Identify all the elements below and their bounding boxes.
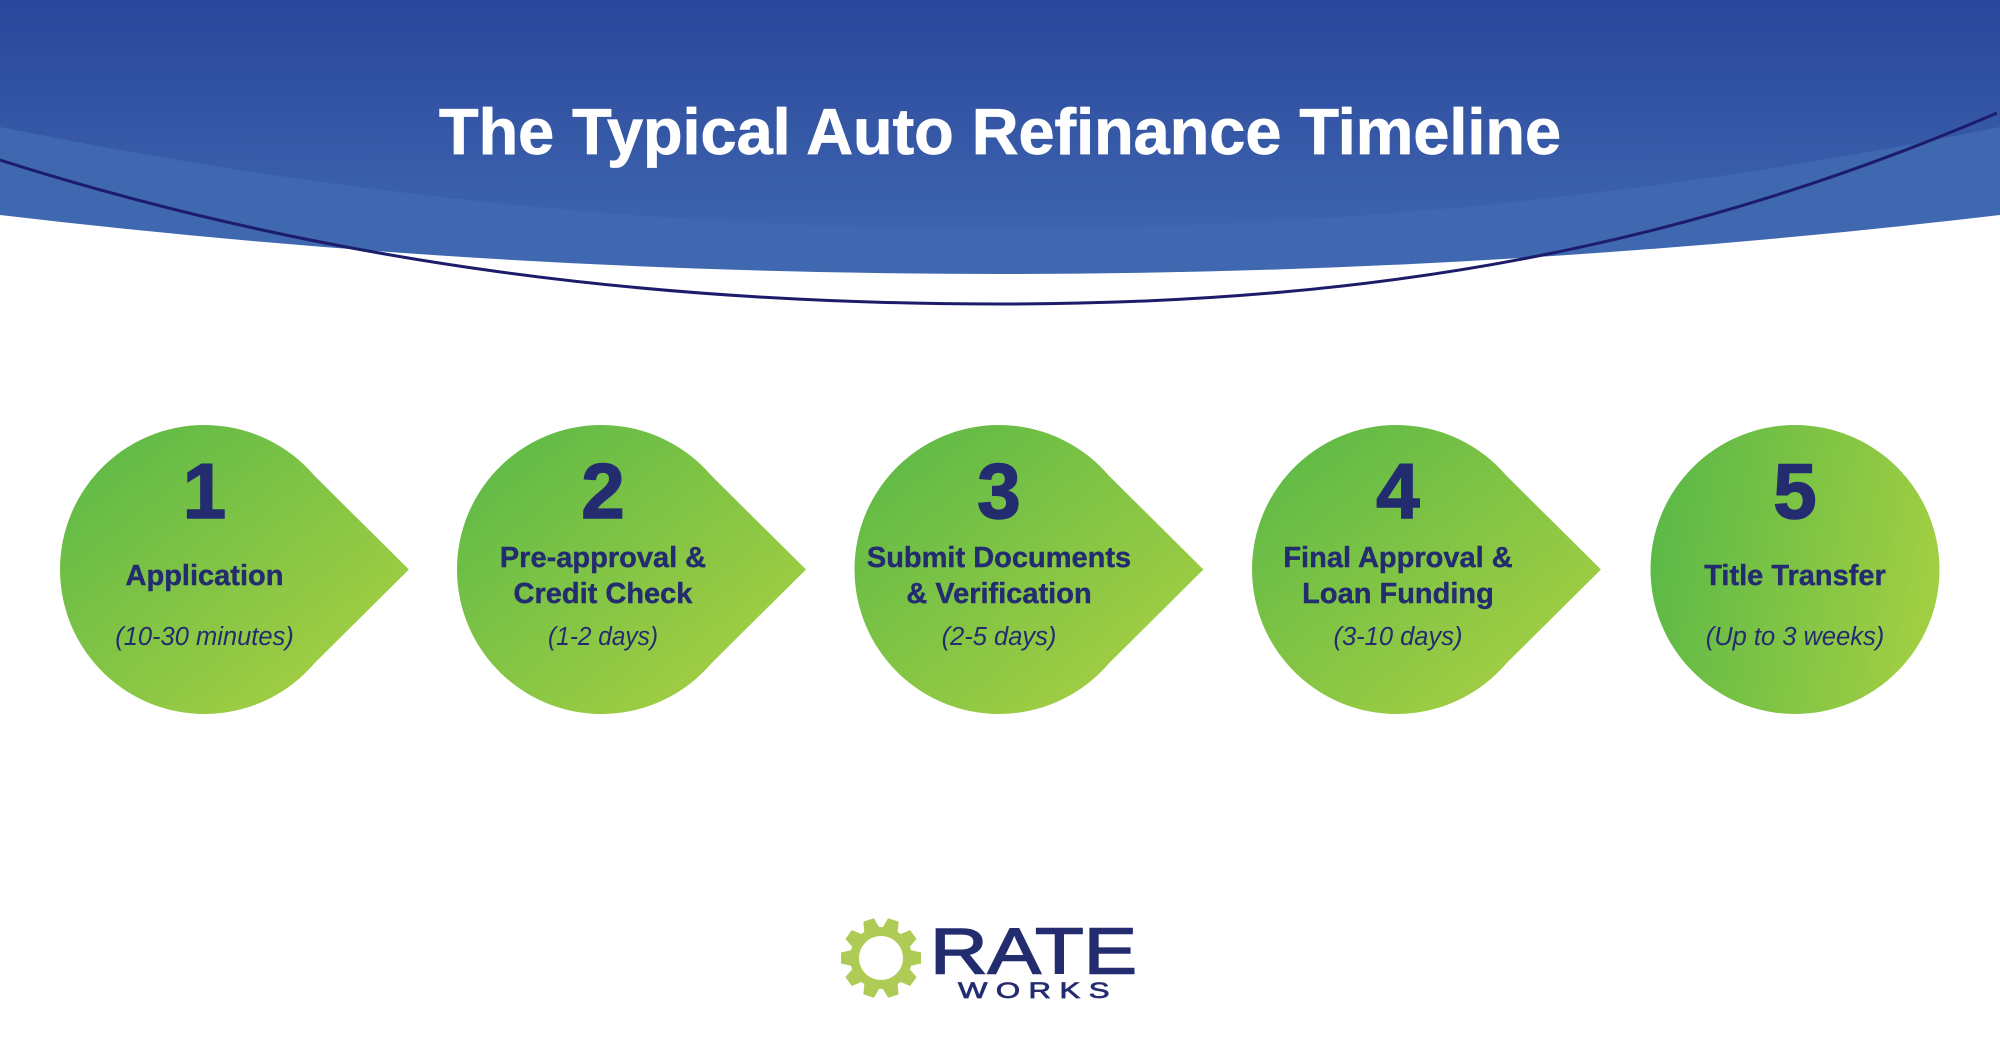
step 4: final approval and loan funding — [1252, 425, 1601, 714]
step 5: title transfer: (Up to 3 weeks) — [1706, 623, 1884, 651]
step 3: submit documents and verification: & Verification — [906, 578, 1092, 610]
step 1: application: 1 — [183, 447, 226, 535]
step 2: pre-approval and credit check: (1-2 days) — [548, 623, 658, 651]
step 2: pre-approval and credit check — [457, 425, 806, 714]
step 5: title transfer: Title Transfer — [1704, 560, 1886, 592]
step 4: final approval and loan funding: 4 — [1376, 447, 1420, 535]
step 3: submit documents and verification: (2-5 days) — [942, 623, 1056, 651]
step 3: submit documents and verification: 3 — [977, 447, 1021, 535]
step 1: application: Application — [126, 560, 283, 592]
step 4: final approval and loan funding: Final Approval & — [1283, 542, 1513, 574]
step 5: title transfer — [1650, 425, 1940, 714]
wordmark: RATE — [930, 914, 1137, 988]
logo: rate works — [841, 914, 1137, 1003]
step 1: application — [60, 425, 409, 714]
wordmark — [930, 914, 1137, 1003]
step 4: final approval and loan funding: Loan Funding — [1302, 578, 1494, 610]
title: The Typical Auto Refinance Timeline — [439, 95, 1561, 168]
step 5: title transfer: 5 — [1773, 447, 1817, 535]
icon: gear — [841, 917, 921, 999]
step 3: submit documents and verification: Submit Documents — [867, 542, 1131, 574]
step 3: submit documents and verification — [854, 425, 1203, 714]
step 2: pre-approval and credit check: Credit Check — [514, 578, 693, 610]
step 1: application: (10-30 minutes) — [115, 623, 294, 651]
wordmark: WORKS — [958, 978, 1118, 1003]
step 2: pre-approval and credit check: Pre-approval & — [500, 542, 706, 574]
step 4: final approval and loan funding: (3-10 days) — [1334, 623, 1462, 651]
header banner — [0, 0, 2000, 304]
step 2: pre-approval and credit check: 2 — [581, 447, 625, 535]
